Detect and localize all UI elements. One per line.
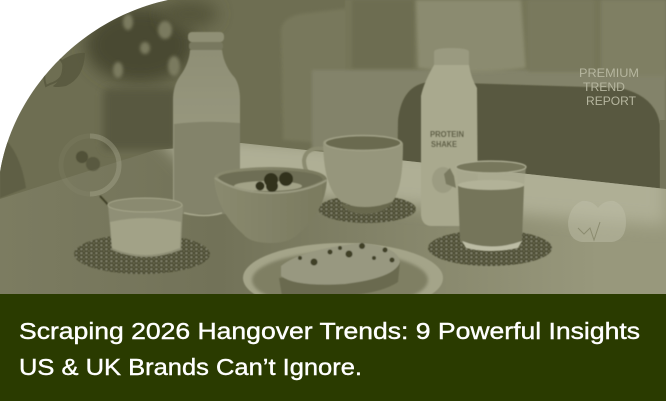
- title text: Scraping 2026 Hangover Trends: 9 Powerful Insights: [19, 318, 640, 344]
- plate: [243, 243, 443, 313]
- room wall background: [0, 0, 666, 199]
- table top: [0, 130, 666, 294]
- toast base: [279, 262, 400, 296]
- spoon: [100, 196, 124, 222]
- milk bottle: [173, 32, 240, 216]
- hero photo: breakfast table: [0, 0, 666, 313]
- dark chair back: [397, 82, 660, 195]
- sofa left arm: [282, 10, 344, 140]
- left chair: [0, 142, 26, 198]
- mug rim: [325, 136, 401, 150]
- protein shake bottle: [421, 48, 478, 226]
- sofa cushion far right: [602, 1, 666, 68]
- shake label text: SHAKE: [431, 140, 458, 149]
- cereal bowl: [214, 167, 327, 243]
- sofa seat: [312, 70, 666, 150]
- shake label text: PROTEIN: [430, 130, 464, 139]
- bowl body: [214, 167, 327, 243]
- shake liquid: [458, 182, 524, 250]
- cup rim: [108, 198, 182, 212]
- faint ring icon: [61, 136, 119, 194]
- title text: [19, 318, 640, 380]
- glass foot: [462, 241, 522, 251]
- berries: [256, 172, 293, 192]
- premium trend report label: [579, 68, 639, 108]
- toast crumbs: [298, 243, 394, 266]
- coaster under mug: [318, 195, 416, 223]
- shake body: [421, 65, 478, 226]
- faint leaf icon: [44, 53, 85, 87]
- cup body: [108, 198, 183, 257]
- table highlight: [158, 143, 666, 228]
- mug body: [323, 135, 403, 208]
- glass upper: [512, 168, 526, 174]
- pillow: [416, 0, 526, 72]
- premium trend report label: REPORT: [586, 96, 636, 108]
- sofa cushion right: [528, 0, 594, 72]
- glass rim: [456, 161, 526, 173]
- plant foliage: [85, 0, 218, 83]
- shake cap: [434, 48, 469, 65]
- bottle base glint: [184, 213, 222, 216]
- glass of shake: [456, 161, 526, 251]
- toast: [279, 243, 400, 296]
- shake label text: [430, 130, 464, 148]
- sofa cushion left: [354, 2, 412, 66]
- small glass with spoon: [100, 196, 183, 257]
- cereal: [234, 181, 302, 191]
- coaster left: [74, 234, 210, 274]
- title text: US & UK Brands Can’t Ignore.: [19, 354, 362, 380]
- coaster right: [428, 230, 552, 266]
- mug foot shade: [340, 201, 394, 214]
- bottle milk: [174, 122, 240, 214]
- premium trend report label: PREMIUM: [579, 68, 639, 80]
- bowl lip: [215, 178, 327, 193]
- shake label graphic: [432, 168, 452, 192]
- bowl inside: [218, 170, 323, 193]
- faint muscle icon: [568, 201, 626, 242]
- bottle glass: [173, 50, 240, 214]
- bottle cap: [188, 32, 224, 42]
- premium trend report label: TREND: [583, 82, 625, 94]
- cup liquid: [110, 218, 181, 255]
- mug handle: [302, 148, 323, 170]
- plant pot: [103, 88, 178, 150]
- toast topping: [281, 243, 400, 285]
- sofa back: [345, 0, 666, 80]
- mug: [304, 135, 403, 214]
- liquid surface: [458, 180, 524, 190]
- title band: [0, 294, 666, 401]
